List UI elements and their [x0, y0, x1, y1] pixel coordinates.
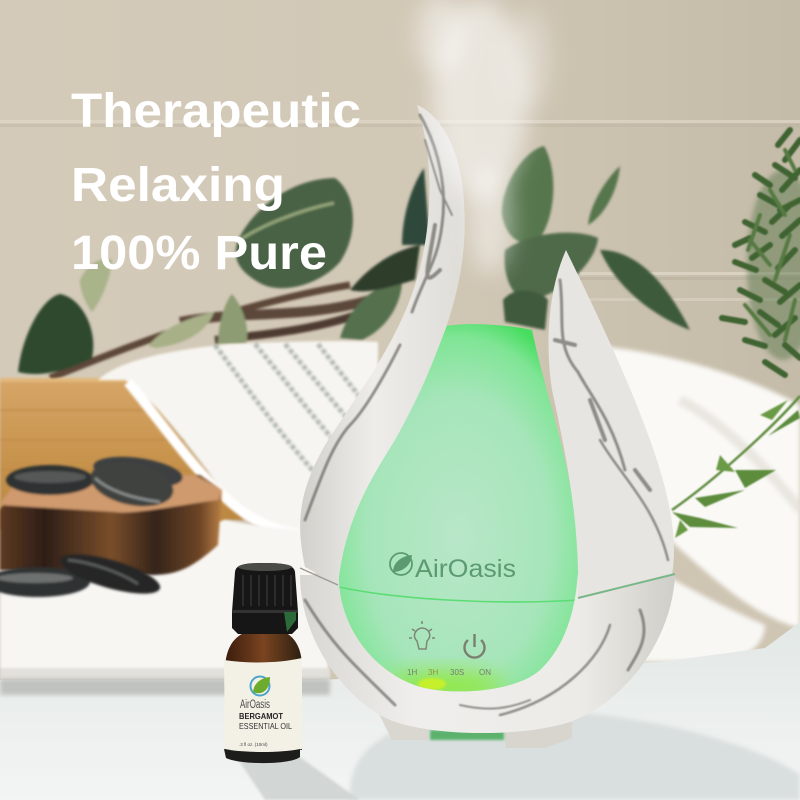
bottle label text: BERGAMOT [239, 712, 283, 721]
lower white towel [0, 520, 330, 680]
glow seam [339, 587, 578, 700]
headline: 100% Pure [71, 227, 327, 280]
bottle logo [240, 676, 270, 711]
right leaf sprig [672, 396, 800, 538]
essential oil bottle: .3 fl oz. (10ml) [239, 742, 268, 747]
glowing green shell [339, 324, 578, 691]
AirOasis logo on shell [390, 553, 516, 583]
eucalyptus branch [18, 146, 690, 378]
lower hot stones [0, 546, 164, 602]
base seam [578, 574, 675, 598]
light icon [409, 621, 435, 649]
headline: Therapeutic [71, 85, 361, 138]
amber bottle shoulders [225, 632, 302, 750]
white towel, right pile [600, 346, 800, 662]
timer labels [407, 668, 491, 677]
wooden box [0, 378, 245, 530]
timer labels: 3H [428, 668, 438, 677]
table surface [0, 622, 800, 800]
aroma diffuser [300, 105, 675, 748]
wall background [0, 0, 800, 420]
white label [224, 658, 302, 752]
right marble petal [549, 250, 674, 598]
headline [71, 85, 361, 280]
left marble petal [300, 105, 465, 585]
white towel, left fold [98, 341, 378, 535]
marble veins [305, 115, 668, 715]
essential oil bottle: ESSENTIAL OIL [239, 722, 292, 731]
right plant [722, 130, 800, 375]
marble base [300, 575, 675, 733]
headline: Relaxing [71, 159, 285, 212]
essential oil bottle [224, 563, 302, 763]
steam mist [416, 0, 550, 275]
timer labels: 1H [407, 668, 417, 677]
timer labels: 30S [450, 668, 464, 677]
diffuser feet [378, 712, 572, 748]
AirOasis logo on shell: AirOasis [415, 555, 516, 583]
tree slice with hot stones [0, 452, 222, 575]
timer labels: ON [479, 668, 491, 677]
bottle logo: AirOasis [240, 699, 270, 711]
power icon [465, 634, 484, 658]
black dropper cap [232, 563, 298, 634]
